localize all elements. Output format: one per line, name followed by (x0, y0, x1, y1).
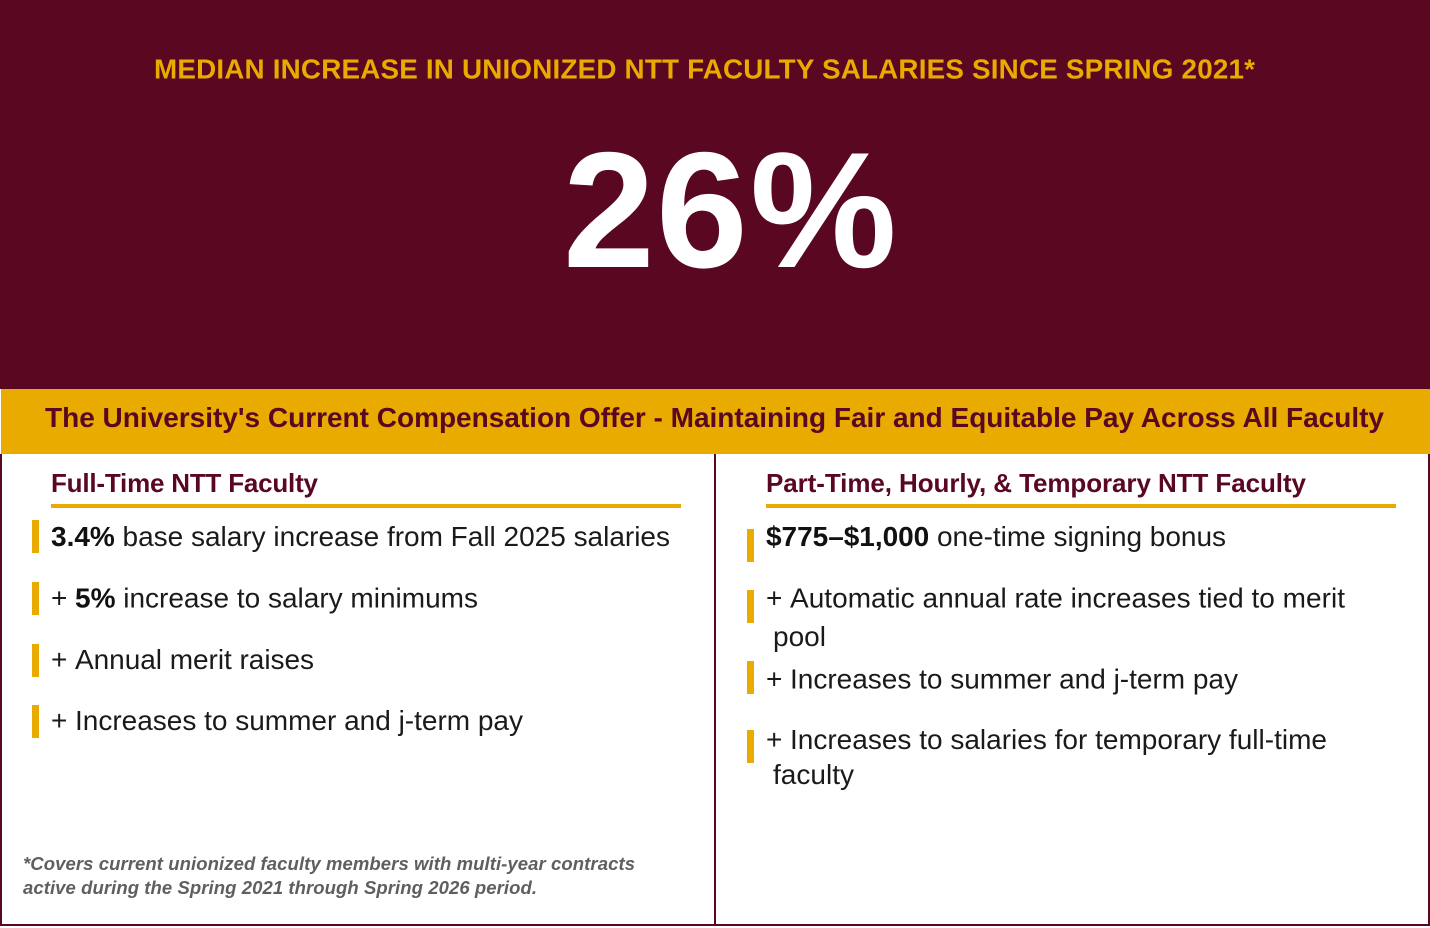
footnote (23, 853, 635, 898)
heading: full-time: Full-Time NTT Faculty (51, 468, 319, 498)
big statistic: 26% (563, 118, 897, 302)
item: merit raises: Annual merit raises (75, 644, 314, 675)
heading: part-time: Part-Time, Hourly, & Temporary NTT Faculty (766, 468, 1307, 498)
item: merit raises: + (51, 644, 67, 675)
item: temporary full-time salaries: + (766, 724, 782, 755)
item: temporary full-time salaries: faculty (773, 759, 854, 790)
item: salary minimums: + (51, 582, 67, 614)
heading: part-time (766, 468, 1396, 508)
banner: current compensation offer (1, 389, 1430, 454)
item: summer and j-term pay: + (51, 705, 67, 736)
item: summer and j-term pay: + (766, 664, 782, 694)
item: annual rate increases (747, 582, 1345, 652)
panel: offer body frame (1, 454, 1429, 925)
panel: part-time, hourly, temporary NTT faculty (747, 468, 1396, 790)
heading: full-time (51, 468, 681, 508)
panel: full-time NTT faculty (23, 468, 681, 898)
footnote: *Covers current unionized faculty members with multi-year contracts (23, 853, 635, 874)
title: MEDIAN INCREASE IN UNIONIZED NTT FACULTY SALARIES SINCE SPRING 2021* (154, 54, 1255, 84)
item: summer and j-term pay: Increases to summer and j-term pay (790, 664, 1238, 694)
footnote: active during the Spring 2021 through Spring 2026 period. (23, 877, 537, 898)
item: signing bonus: $775–$1,000 one-time signing bonus (766, 521, 1226, 552)
item: summer and j-term pay: Increases to summer and j-term pay (75, 705, 523, 736)
item: base salary increase: 3.4% base salary increase from Fall 2025 salaries (51, 521, 670, 552)
item: annual rate increases: + (766, 582, 782, 614)
item: salary minimums: 5% increase to salary minimums (75, 582, 478, 614)
item: temporary full-time salaries (747, 724, 1327, 790)
item: annual rate increases: Automatic annual rate increases tied to merit (790, 582, 1345, 614)
banner: current compensation offer: The University's Current Compensation Offer - Maintaining Fair and Equitable Pay Across All Faculty (45, 402, 1384, 433)
item: temporary full-time salaries: Increases to salaries for temporary full-time (790, 724, 1327, 755)
item: annual rate increases: pool (773, 621, 826, 652)
